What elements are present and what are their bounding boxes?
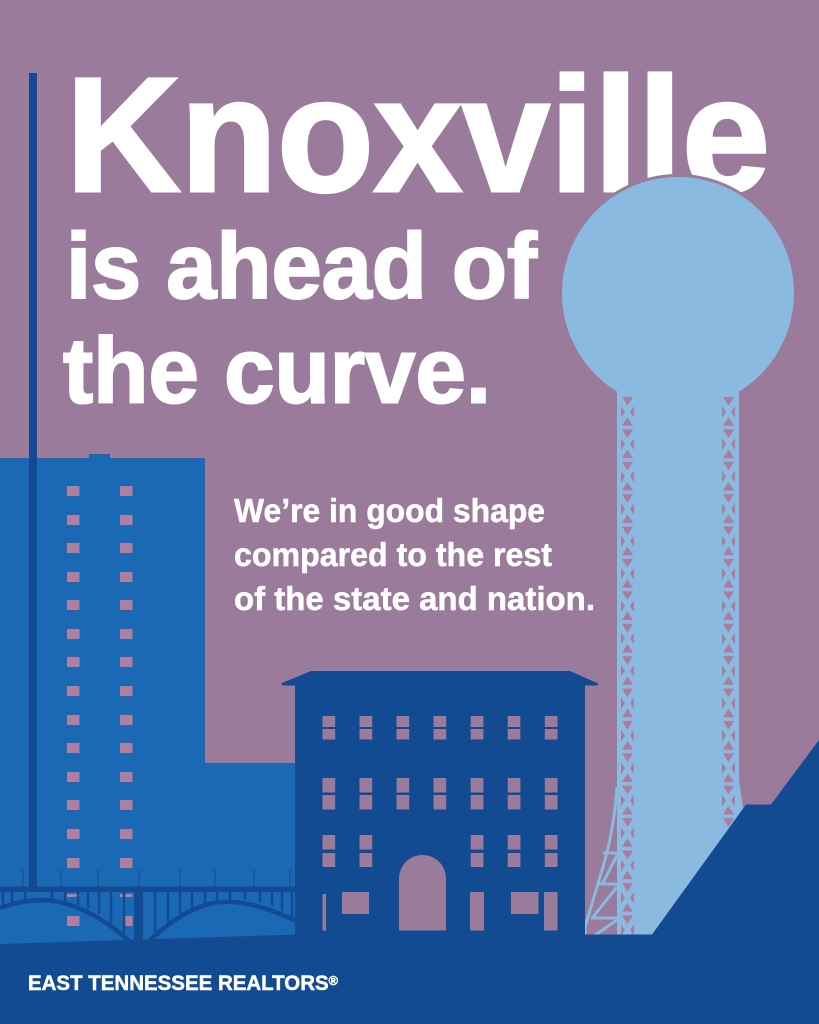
foreground hillside and ground [0, 740, 819, 1024]
footer brand name: ® [329, 973, 338, 988]
bridge lamp posts [23, 870, 290, 887]
Sunsphere tower [560, 176, 796, 935]
title: is ahead of: is ahead of [66, 214, 538, 318]
subheading text: compared to the rest [234, 536, 552, 573]
bridge [0, 870, 296, 944]
tower lattice left [621, 397, 634, 935]
footer brand name: EAST TENNESSEE REALTORS [28, 972, 336, 995]
subheading text: We’re in good shape [234, 492, 545, 529]
building windows [322, 716, 558, 930]
title: the curve.: the curve. [63, 318, 491, 422]
tower stem [617, 392, 743, 935]
sphere [560, 176, 796, 410]
title: Knoxville: Knoxville [66, 43, 770, 226]
tower base flare [585, 787, 617, 935]
bridge stanchions [3, 892, 292, 934]
tall mid-blue tower building [0, 454, 296, 945]
flag pole [29, 73, 37, 888]
tower windows [67, 486, 132, 926]
arched doorway [399, 855, 446, 930]
tower lattice right [722, 397, 735, 827]
bridge deck [0, 886, 296, 892]
subheading text [234, 492, 595, 617]
dark blue building [281, 671, 598, 940]
bridge pier [134, 886, 143, 944]
bridge arches [0, 900, 132, 944]
subheading text: of the state and nation. [234, 580, 595, 617]
